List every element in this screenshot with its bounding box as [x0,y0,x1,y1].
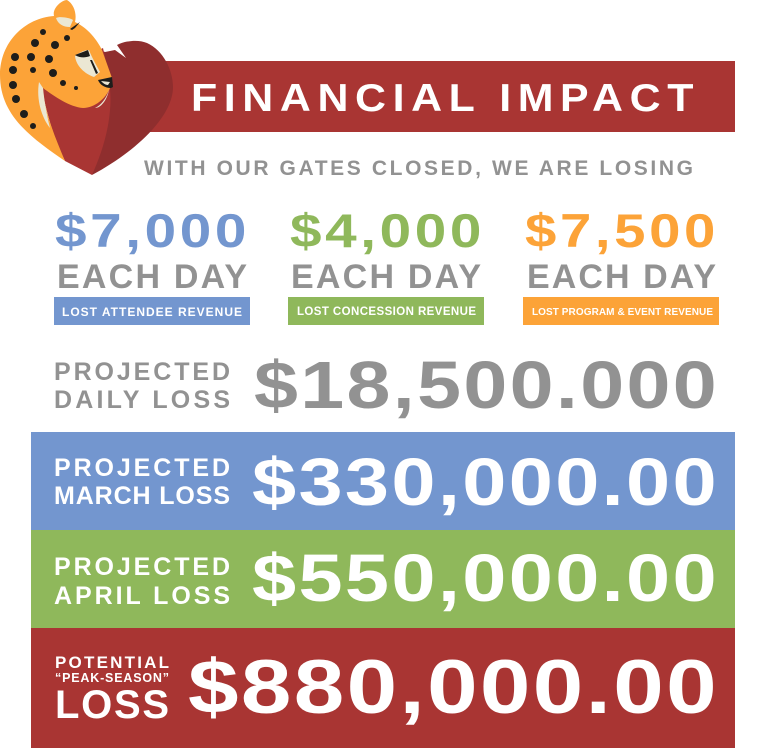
row: potential peak-season loss [31,628,735,748]
row: projected daily loss [54,348,719,423]
title: FINANCIAL IMPACT [191,77,700,120]
row: potential peak-season loss: POTENTIAL [55,653,169,672]
row: projected march loss: PROJECTED [54,454,230,482]
row: potential peak-season loss: “PEAK-SEASON” [55,671,169,685]
row: potential peak-season loss: LOSS [55,683,169,727]
row: projected april loss: $550,000.00 [252,541,719,616]
stat: attendee revenue: EACH DAY [57,258,247,296]
stat: concession revenue: EACH DAY [291,258,481,296]
row: projected daily loss: DAILY LOSS [54,386,230,414]
row: projected march loss [31,432,735,530]
title banner [130,61,735,132]
row: projected april loss [31,530,735,628]
icon: cheetah heart logo [0,0,173,175]
stat: attendee revenue [54,204,250,325]
row: projected march loss: $330,000.00 [252,445,719,520]
stat: concession revenue: LOST CONCESSION REVENUE [297,306,476,318]
stat: concession revenue [288,204,485,325]
stat: attendee revenue: LOST ATTENDEE REVENUE [62,305,242,319]
stat: program and event revenue [523,204,719,325]
row: projected daily loss: $18,500.000 [254,348,719,423]
subtitle: WITH OUR GATES CLOSED, WE ARE LOSING [144,157,693,180]
stat: concession revenue: $4,000 [290,204,485,257]
row: projected april loss: PROJECTED [54,553,230,581]
row: projected april loss: APRIL LOSS [54,582,230,610]
stat: program and event revenue: LOST PROGRAM & EVENT REVENUE [532,307,713,318]
stat: program and event revenue: $7,500 [525,204,719,257]
row: projected march loss: MARCH LOSS [54,482,230,510]
stat: attendee revenue: $7,000 [55,204,250,257]
row: potential peak-season loss: $880,000.00 [188,645,719,730]
row: projected daily loss: PROJECTED [54,358,230,386]
stat: program and event revenue: EACH DAY [527,258,716,296]
